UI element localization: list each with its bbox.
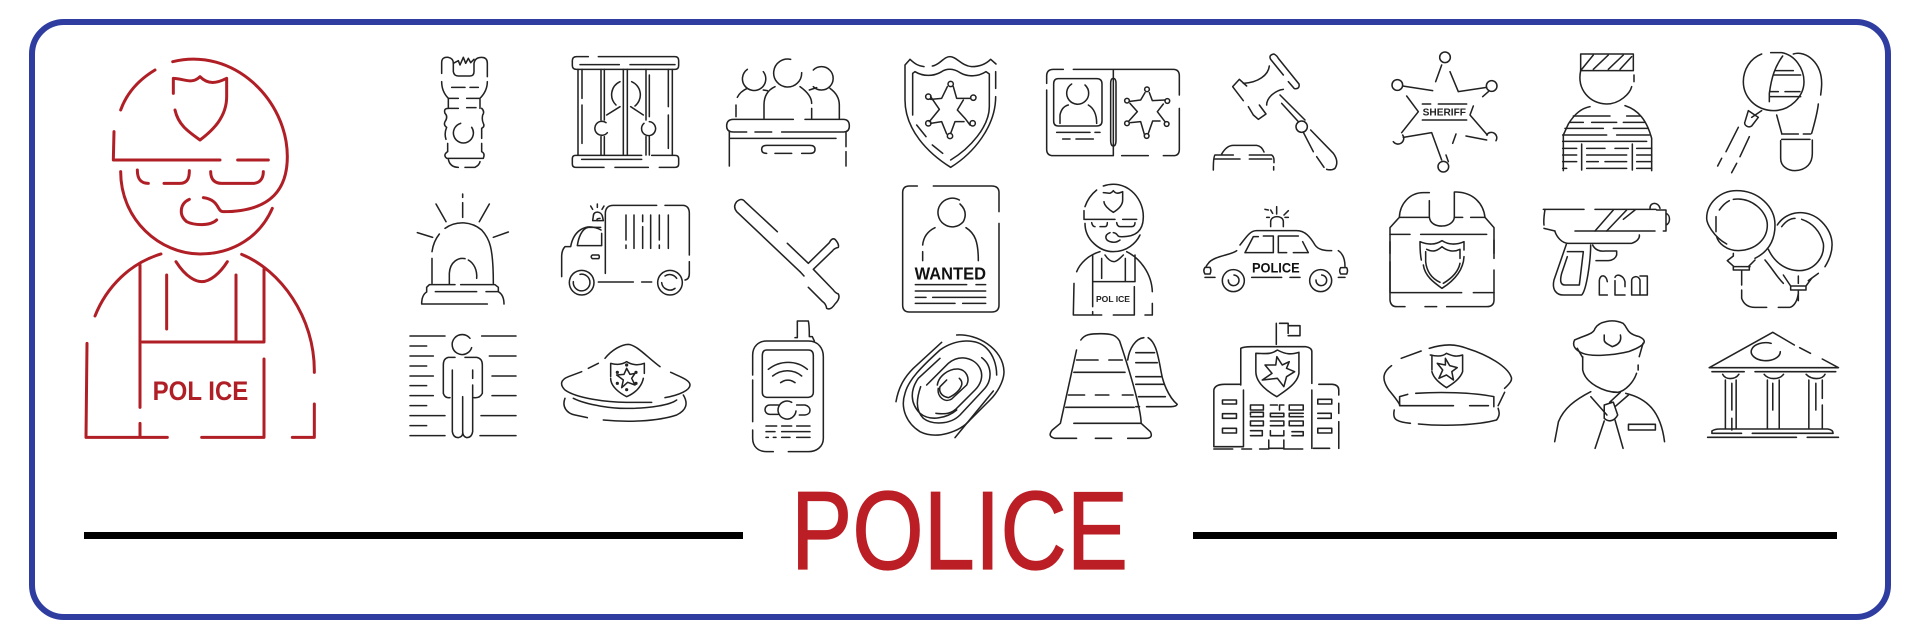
- divider: right rule: [1193, 532, 1837, 539]
- icon: traffic cones: [1050, 334, 1177, 438]
- icon: prison van: [562, 204, 689, 295]
- icon: police officer small: POL ICE: [1096, 294, 1130, 304]
- icon: prisoner: [1563, 54, 1652, 171]
- icon: courthouse: [1708, 332, 1838, 437]
- icon: police officer small: [1073, 184, 1152, 315]
- title: POLICE: [791, 469, 1128, 593]
- icon: police car: [1204, 207, 1347, 292]
- icon: stun gun: [442, 57, 487, 167]
- icon: peaked cap: [1384, 345, 1512, 425]
- icon: police baton: [735, 199, 839, 309]
- icon: handgun: [1543, 203, 1669, 295]
- icon: sheriff star: SHERIFF: [1423, 108, 1466, 119]
- icon: magnifier footprint: [1718, 53, 1822, 173]
- icon: jury: [727, 59, 849, 166]
- icon: police cap: [562, 344, 690, 421]
- icon: star shield badge: [905, 57, 996, 167]
- icon: police light: [417, 194, 508, 304]
- icon: gavel: [1213, 54, 1337, 170]
- icon: sheriff star: [1392, 52, 1497, 172]
- icon: large police officer: POL ICE: [153, 376, 248, 406]
- icon: fingerprint: [896, 335, 1004, 438]
- icon: bulletproof vest: [1390, 192, 1494, 307]
- icon: jail cell: [572, 57, 679, 167]
- icon: police station: [1214, 323, 1339, 449]
- icon: large police officer: [86, 59, 314, 437]
- icon: police ID card: [1047, 69, 1179, 156]
- icon: mugshot lineup: [410, 335, 516, 438]
- icon: police officer bust: [1555, 321, 1665, 448]
- icon: wanted poster: WANTED: [915, 263, 986, 283]
- icon: handcuffs: [1707, 191, 1832, 307]
- icon: wanted poster: [903, 186, 999, 312]
- icon: police car: POLICE: [1252, 259, 1300, 275]
- icon: walkie talkie: [753, 321, 823, 452]
- divider: left rule: [84, 532, 743, 539]
